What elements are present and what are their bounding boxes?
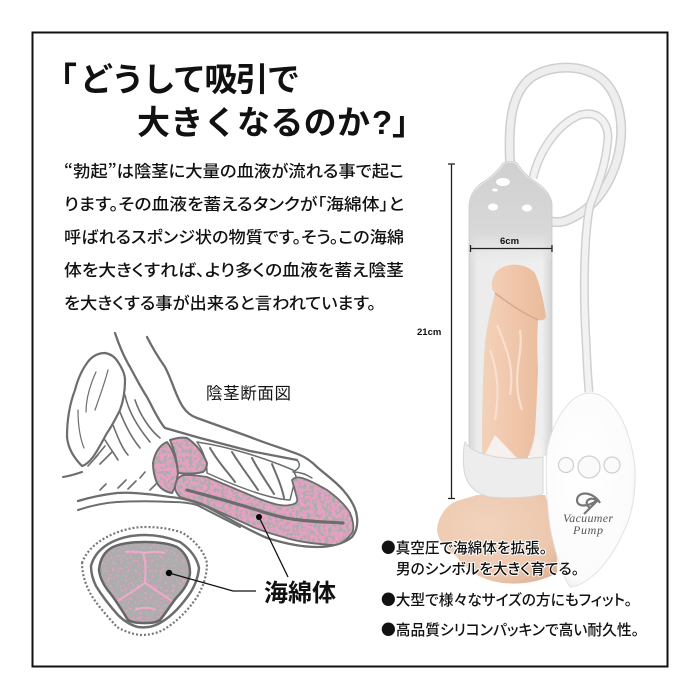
title: ?: [372, 104, 392, 141]
base: [437, 495, 557, 584]
controller logo text: Pump: [572, 523, 603, 537]
feature bullets: 男のシンボルを大きく育てる。: [396, 558, 579, 579]
controller logo text: [563, 511, 613, 537]
body text: ります。その血液を蓄えるタンクが「海綿体」と: [64, 191, 404, 215]
dome highlights: [488, 178, 532, 212]
body text: 呼ばれるスポンジ状の物質です。そう。この海綿: [64, 224, 404, 248]
diagram caption: 陰茎断面図: [206, 384, 291, 403]
width label: 6cm: [500, 236, 519, 247]
cylinder: [469, 162, 552, 455]
body text: [64, 158, 404, 314]
controller logo mark: [577, 494, 600, 514]
inner form: [482, 265, 546, 460]
title: 大きくなるのか: [137, 96, 370, 144]
bone outline: [67, 353, 125, 466]
feature bullets: ●高品質シリコンパッキンで高い耐久性。: [381, 619, 639, 640]
cross-section diagram: [82, 527, 207, 635]
tip cap: [293, 460, 312, 478]
width dimension: [470, 245, 552, 252]
tube one back: [510, 68, 621, 222]
controller logo text: Vacuumer: [563, 511, 613, 525]
bone inner marks: [78, 370, 108, 448]
cylinder dome shade: [470, 162, 551, 262]
feature bullets: ●大型で様々なサイズの方にもフィット。: [381, 589, 632, 610]
silicone ring: [463, 442, 543, 498]
title: どうして吸引で: [80, 53, 300, 101]
vein highlights: [490, 325, 522, 420]
anatomical section diagram: [63, 333, 357, 547]
product photo illustration: [437, 68, 635, 587]
controller body: [546, 393, 635, 587]
height label: 21cm: [417, 327, 441, 338]
body text: 体を大きくすれば、より多くの血液を蓄え陰茎: [64, 257, 404, 281]
body text: を大きくする事が出来ると言われています。: [64, 290, 376, 314]
feature bullets: ●真空圧で海綿体を拡張。: [381, 537, 547, 558]
height dimension: [448, 164, 455, 498]
body text: “勃起”は陰茎に大量の血液が流れる事で起こ: [64, 158, 404, 182]
shade under head: [495, 293, 538, 320]
pointer line to cross section: [166, 570, 256, 591]
label: cavernous body: 海綿体: [264, 580, 336, 607]
title: 「: [44, 53, 77, 101]
erectile tissue pink: [153, 438, 353, 545]
pointer to shaft tissue: [256, 514, 288, 577]
title: [44, 53, 425, 144]
tube two: [533, 114, 608, 392]
fan hatching: [88, 395, 160, 490]
silicone ring petals: [483, 435, 544, 458]
outer contours: [78, 337, 357, 547]
tunica hatching: [197, 442, 296, 500]
controller buttons: [558, 456, 620, 478]
title: 」: [392, 96, 425, 144]
feature bullets: [381, 537, 639, 640]
